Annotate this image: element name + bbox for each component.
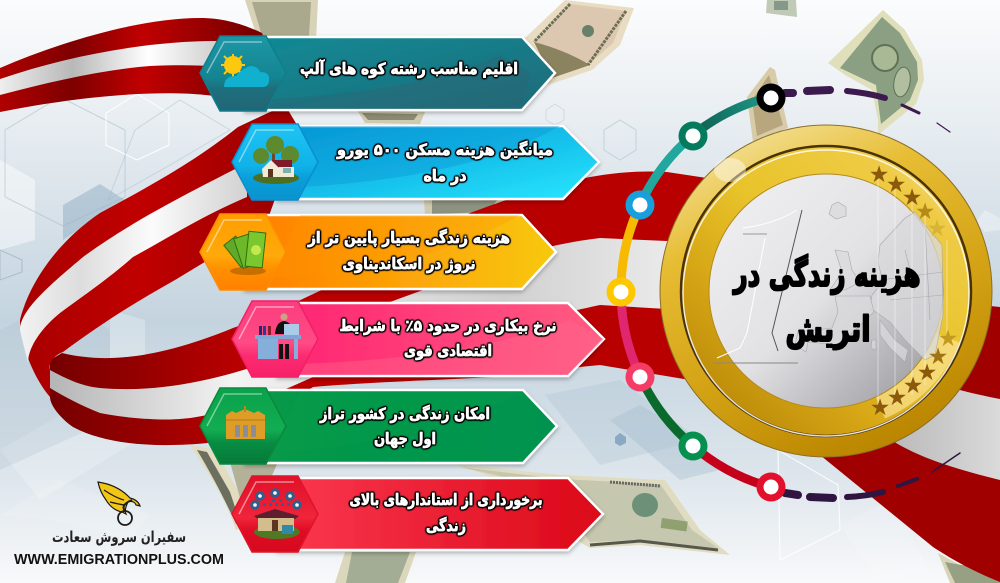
banknote scrap between banners xyxy=(357,110,425,124)
text: نرخ بیکاری در حدود ۵٪ با شرایط xyxy=(339,317,556,335)
ribbon lower sweep xyxy=(50,171,720,445)
node 6 xyxy=(678,432,708,460)
numeral 1 line art xyxy=(713,210,802,363)
node 7 xyxy=(756,472,786,502)
green banknote upper right xyxy=(828,10,924,135)
panel: high standards xyxy=(232,476,603,552)
icon: office desk xyxy=(255,313,301,359)
coin title: اتریش xyxy=(786,310,870,350)
coin title: هزینه زندگی در xyxy=(732,254,920,295)
text: میانگین هزینه مسکن ۵۰۰ یورو xyxy=(336,140,553,159)
node 5 xyxy=(626,362,654,392)
stars: ★ xyxy=(928,344,948,370)
icon: winged emblem xyxy=(98,482,140,525)
logo xyxy=(14,482,224,568)
panel: first-class country: اول جهان xyxy=(374,430,436,448)
dashed line bottom xyxy=(785,453,960,498)
panel: unemployment xyxy=(232,301,604,377)
euro coin xyxy=(660,125,992,457)
ribbon top band xyxy=(0,18,290,112)
timeline arc xyxy=(606,84,960,502)
icon: palace xyxy=(226,406,265,439)
stars: ★ xyxy=(938,326,958,352)
text: برخورداری از استاندارهای بالای xyxy=(350,491,542,509)
text: اقلیم مناسب رشته کوه های آلپ xyxy=(300,59,518,79)
banknote top right of first banner xyxy=(525,0,634,85)
stars: ★ xyxy=(903,373,923,399)
website: WWW.EMIGRATIONPLUS.COM xyxy=(14,552,224,568)
coin title xyxy=(732,254,920,350)
stars: ★ xyxy=(902,185,922,211)
icon: smart home xyxy=(250,488,302,539)
coin highlights xyxy=(878,177,947,410)
icon: house and trees xyxy=(253,136,299,184)
stars: ★ xyxy=(887,385,907,411)
node 1 xyxy=(756,84,786,112)
node 4 xyxy=(606,278,636,306)
stars: ★ xyxy=(915,199,935,225)
banknote right of last banner xyxy=(455,464,730,555)
banknote top centre xyxy=(245,0,318,40)
stars: ★ xyxy=(927,216,947,242)
node 2 xyxy=(678,122,708,150)
map of europe xyxy=(795,202,943,362)
panel: cost of living xyxy=(200,214,556,290)
stars xyxy=(869,162,958,421)
panel: first-class country xyxy=(200,388,557,464)
banknote lower left xyxy=(190,445,278,530)
icon: sun and cloud xyxy=(221,54,269,87)
banknote bottom right xyxy=(938,553,1000,583)
panel: unemployment: اقتصادی قوی xyxy=(404,342,492,360)
stars: ★ xyxy=(869,162,889,188)
small banknote top xyxy=(766,0,797,17)
ribbon right of coin xyxy=(820,300,1000,582)
icon: money bills xyxy=(224,231,266,275)
text: هزینه زندگی بسیار پایین تر از xyxy=(307,228,510,248)
banknote bottom centre xyxy=(335,552,416,583)
panel: high standards: زندگی xyxy=(426,516,466,535)
dashed line top xyxy=(785,90,950,132)
panel: housing cost: در ماه xyxy=(424,167,467,185)
ribbon descending band xyxy=(20,105,300,397)
node 3 xyxy=(626,190,654,220)
text: امکان زندگی در کشور تراز xyxy=(319,404,490,423)
panel: cost of living: نروژ در اسکاندیناوی xyxy=(342,255,476,273)
panel: housing cost xyxy=(232,124,599,200)
stars: ★ xyxy=(870,395,890,421)
banknote behind first node xyxy=(747,67,788,142)
stars: ★ xyxy=(917,360,937,386)
stars: ★ xyxy=(886,172,906,198)
banknote scrap under second banner xyxy=(424,197,510,216)
brand name: سفیران سروش سعادت xyxy=(52,528,186,546)
panel: climate xyxy=(200,36,555,111)
